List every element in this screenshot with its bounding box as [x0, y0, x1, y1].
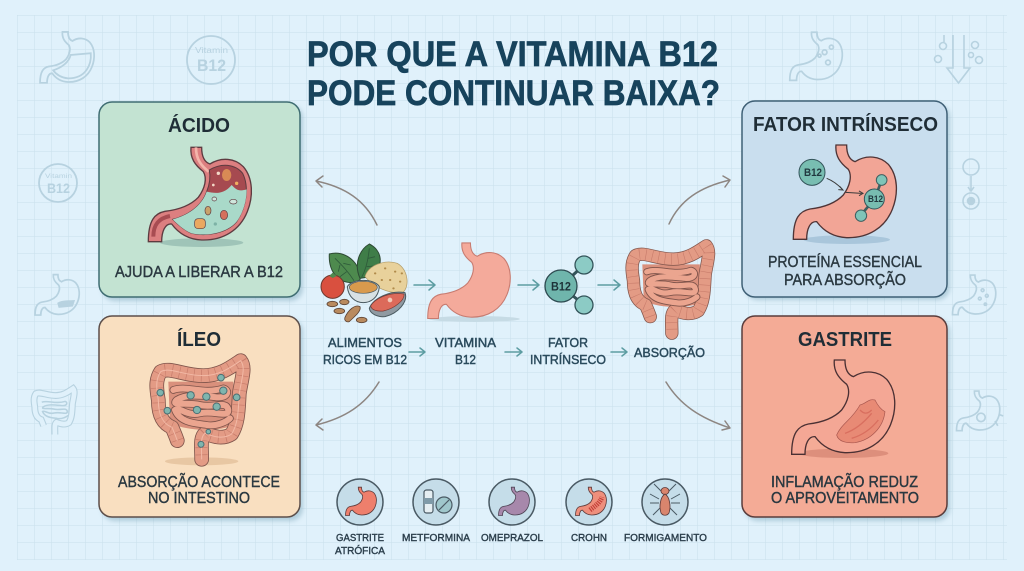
label: crohn: CROHN [571, 532, 607, 544]
label: B12 molecule: B12 [804, 167, 822, 179]
background icon: stomach top right [790, 32, 842, 80]
illustration: inflamed stomach [792, 360, 895, 458]
flow label: vitamina: B12 [455, 352, 476, 367]
caption: gastrite [771, 474, 919, 507]
illustration: stomach with acid [148, 147, 251, 247]
background icon: stomach left [35, 275, 79, 315]
background icon: vitamin B12 badge top [187, 36, 235, 84]
flow label: absorção: ABSORÇÃO [634, 345, 705, 360]
background icon: vitamin B12 badge left: B12 [47, 180, 70, 196]
icon: flow intestine [632, 246, 709, 333]
caption: íleo [118, 474, 280, 507]
label: gastrite atrófica: ATRÓFICA [335, 544, 385, 557]
icon: flow stomach [428, 243, 520, 322]
label: omeprazol: OMEPRAZOL [481, 532, 543, 544]
heading: íleo: ÍLEO [177, 328, 221, 351]
caption: fator intrínseco [768, 254, 922, 289]
background icon: falling arrow top right [934, 35, 982, 83]
flow label: alimentos: RICOS EM B12 [323, 352, 407, 367]
arrow: food to stomach [414, 280, 435, 290]
icon: metformina [413, 479, 459, 525]
label: gastrite atrófica: GASTRITE [336, 532, 384, 544]
background icon: vitamin B12 badge left: Vitamin [45, 173, 72, 180]
panel: ácido [99, 102, 303, 301]
background icon: stomach with ulcer bottom right [956, 391, 1003, 431]
title [307, 35, 720, 113]
heading: fator intrínseco: FATOR INTRÍNSECO [753, 113, 938, 136]
panel: íleo [99, 316, 303, 521]
background icon: circles and arrow right [963, 159, 979, 209]
caption: gastrite: O APROVEITAMENTO [771, 490, 919, 507]
arrow: to ácido [316, 176, 377, 225]
arrow: to íleo [316, 382, 379, 430]
background icon: vitamin B12 badge top: B12 [197, 56, 226, 75]
icon: foods rich in B12 [321, 244, 407, 323]
caption: gastrite: INFLAMAÇÃO REDUZ [771, 474, 918, 491]
arrow: label step three [611, 348, 627, 356]
caption: fator intrínseco: PARA ABSORÇÃO [784, 272, 906, 289]
arrow: label step two [505, 348, 522, 356]
background icon: vitamin B12 badge left [39, 164, 77, 202]
flow label: alimentos [323, 335, 407, 367]
arrow: stomach to molecule [518, 280, 539, 290]
arrow: molecule to intestine [598, 280, 620, 290]
caption: íleo: ABSORÇÃO ACONTECE [118, 474, 280, 491]
panel: gastrite [742, 316, 950, 521]
title: POR QUE A VITAMINA B12 [307, 35, 718, 74]
caption: ácido: AJUDA A LIBERAR A B12 [115, 264, 283, 281]
panel: fator intrínseco [742, 101, 950, 300]
illustration: stomach with B12 binding [793, 145, 896, 244]
arrow: to gastrite [666, 382, 730, 430]
title: PODE CONTINUAR BAIXA? [307, 74, 720, 113]
arrow: label step one [409, 348, 425, 356]
label: metformina: METFORMINA [402, 532, 470, 544]
flow label: fator: INTRÍNSECO [530, 352, 606, 367]
label: gastrite atrófica [335, 532, 385, 557]
icon: crohn [566, 479, 612, 525]
icon: B12 molecule [545, 256, 593, 314]
arrow: to fator intrínseco [669, 176, 730, 224]
illustration: intestine with B12 dots [157, 361, 243, 465]
background icon: stomach right [952, 275, 996, 315]
flow label: vitamina: VITAMINA [435, 335, 496, 350]
flow label: fator: FATOR [548, 335, 588, 350]
caption: fator intrínseco: PROTEÍNA ESSENCIAL [768, 254, 922, 271]
icon: formigamento [642, 479, 688, 525]
icon: omeprazol [489, 479, 535, 525]
flow label: fator [530, 335, 606, 367]
flow label: alimentos: ALIMENTOS [328, 335, 402, 350]
label: formigamento: FORMIGAMENTO [624, 532, 707, 544]
background icon: intestine left [34, 389, 74, 434]
label: bound B12: B12 [868, 194, 883, 205]
caption: íleo: NO INTESTINO [148, 490, 250, 507]
heading: ácido: ÁCIDO [168, 114, 230, 137]
background icon: vitamin B12 badge top: Vitamin [195, 46, 228, 55]
background icon: stomach top left [40, 32, 94, 83]
flow label: vitamina [435, 335, 496, 367]
icon: gastrite atrófica [337, 479, 383, 525]
icon: B12 molecule: B12 [551, 280, 571, 294]
heading: gastrite: GASTRITE [798, 329, 892, 351]
